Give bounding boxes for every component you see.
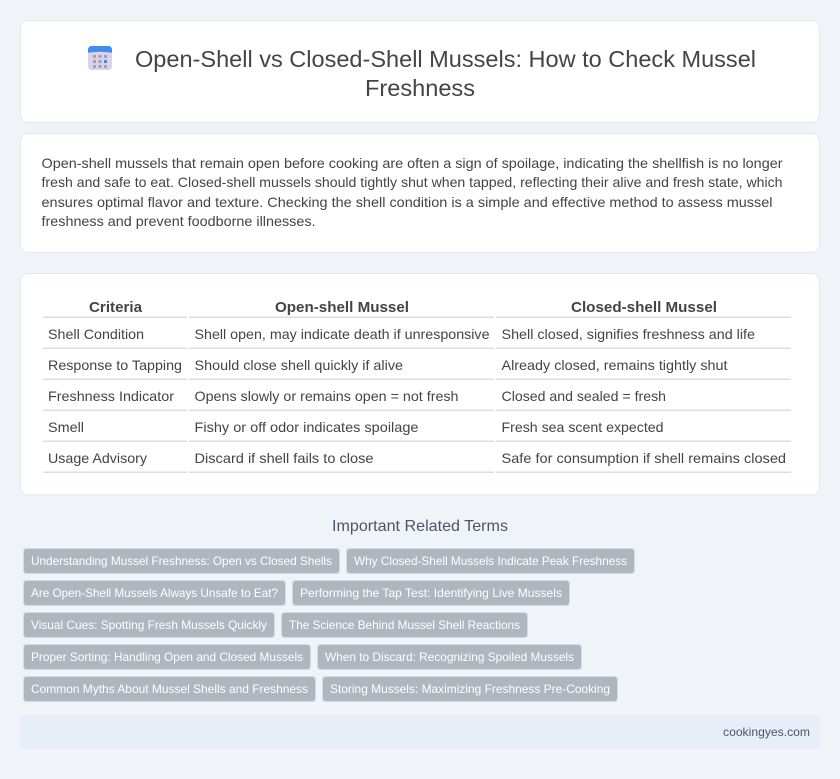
table row: response to tapping: Should close shell quickly if alive: [194, 357, 403, 373]
table row: freshness indicator: [48, 388, 666, 404]
related term tags: Why Closed-Shell Mussels Indicate Peak Freshness: [354, 554, 627, 568]
related term tags: Performing the Tap Test: Identifying Live Mussels: [300, 586, 562, 600]
related term tags: Are Open-Shell Mussels Always Unsafe to Eat?: [31, 586, 278, 600]
table row: response to tapping: Already closed, remains tightly shut: [502, 357, 728, 373]
text block: introduction: fresh and safe to eat. Closed-shell mussels should tightly shut when tapped, reflecting their alive and fresh state, which: [42, 174, 782, 190]
table row: smell: Fresh sea scent expected: [502, 419, 664, 435]
text block: introduction: [42, 155, 783, 229]
table header: Open-shell Mussel: [275, 299, 409, 316]
table header: Criteria: [89, 299, 143, 316]
title: Freshness: [365, 75, 475, 101]
table row: response to tapping: [48, 357, 728, 373]
related term tags: Visual Cues: Spotting Fresh Mussels Quickly: [31, 618, 267, 632]
related term tags: The Science Behind Mussel Shell Reactions: [289, 618, 520, 632]
table row: shell condition: Shell Condition: [48, 326, 144, 342]
table row: freshness indicator: Opens slowly or remains open = not fresh: [194, 388, 458, 404]
table row: freshness indicator: Freshness Indicator: [48, 388, 174, 404]
footer: [20, 715, 820, 749]
table row: response to tapping: Response to Tapping: [48, 357, 182, 373]
related term tags: Understanding Mussel Freshness: Open vs Closed Shells: [31, 554, 332, 568]
table row: smell: Fishy or off odor indicates spoilage: [194, 419, 419, 435]
related term tags: [24, 548, 634, 702]
table header: Closed-shell Mussel: [571, 299, 717, 316]
panel: comparison table: [20, 274, 820, 495]
text block: introduction: ensures optimal flavor and texture. Checking the shell condition is a simple and effective method to assess mussel: [42, 194, 772, 210]
table row: usage advisory: Safe for consumption if shell remains closed: [502, 450, 786, 466]
table row: usage advisory: [48, 450, 786, 466]
table row: usage advisory: Usage Advisory: [48, 450, 147, 466]
related term tags: When to Discard: Recognizing Spoiled Mussels: [325, 650, 574, 664]
table row: smell: Smell: [48, 419, 84, 435]
table row: shell condition: Shell open, may indicate death if unresponsive: [194, 326, 490, 342]
related term tags: Proper Sorting: Handling Open and Closed Mussels: [31, 650, 303, 664]
table row: shell condition: Shell closed, signifies freshness and life: [502, 326, 755, 342]
title: [135, 46, 756, 101]
related term tags: Common Myths About Mussel Shells and Freshness: [31, 682, 308, 696]
heading: important related terms: Important Related Terms: [332, 518, 508, 535]
table row: freshness indicator: Closed and sealed = fresh: [502, 388, 666, 404]
panel: introduction: [20, 134, 820, 252]
text block: introduction: Open-shell mussels that remain open before cooking are often a sign of spoilage, indicating the shellfish is no longer: [42, 155, 783, 171]
table header: [89, 299, 717, 316]
footer: cookingyes.com: [723, 725, 810, 739]
panel: header: [20, 20, 820, 122]
icon: calendar: [88, 46, 112, 70]
table row: shell condition: [48, 326, 755, 342]
table row: smell: [48, 419, 664, 435]
table row: usage advisory: Discard if shell fails to close: [194, 450, 374, 466]
related term tags: Storing Mussels: Maximizing Freshness Pre-Cooking: [330, 682, 610, 696]
title: Open-Shell vs Closed-Shell Mussels: How to Check Mussel: [135, 46, 756, 72]
text block: introduction: freshness and prevent foodborne illnesses.: [42, 213, 316, 229]
